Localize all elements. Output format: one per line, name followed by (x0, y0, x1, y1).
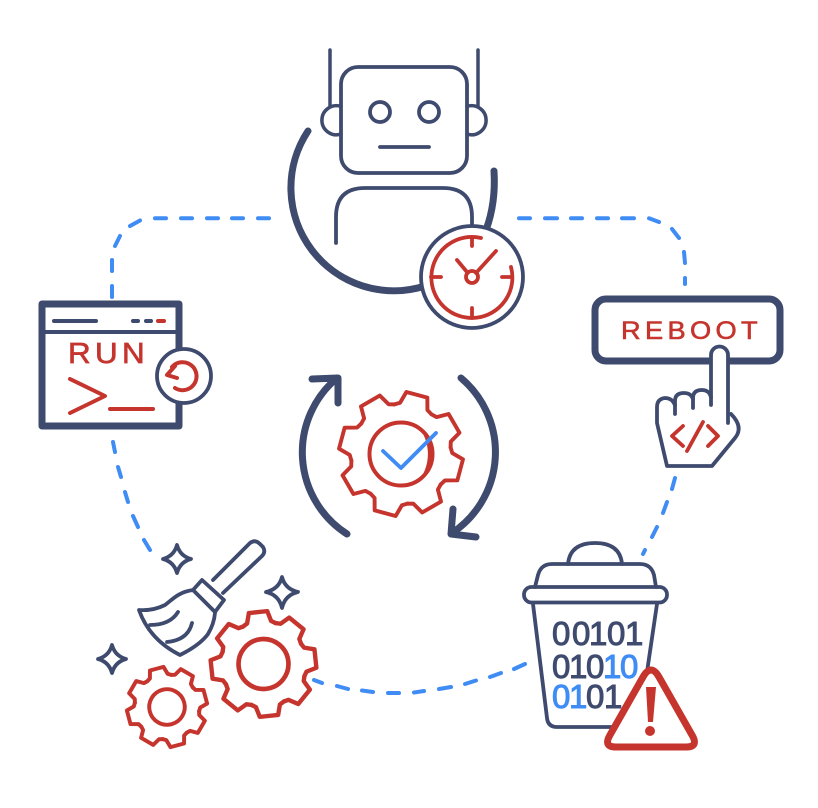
robot antennas and ears (322, 50, 486, 135)
large gear (206, 607, 321, 721)
prompt symbol (70, 379, 153, 413)
robot head (341, 67, 467, 173)
sparkles (98, 545, 298, 673)
icon: trash can with binary data (524, 543, 694, 747)
small gear (118, 658, 216, 756)
binary digits: 00101 (552, 615, 643, 652)
binary digits: 01 (552, 678, 587, 715)
reboot button (595, 299, 780, 361)
broom (139, 541, 264, 655)
terminal frame (42, 304, 179, 426)
icon: central gear with arrows (302, 378, 495, 537)
binary digits: 01 (586, 678, 622, 715)
trash body (533, 604, 657, 727)
pointing hand (657, 346, 739, 466)
icon: reboot button with hand (595, 299, 780, 466)
trash lid (524, 543, 667, 602)
robot eyes and mouth (370, 102, 439, 147)
REBOOT label: REBOOT (621, 317, 762, 345)
icon: broom with gears (98, 541, 321, 756)
central gear (326, 379, 476, 529)
clock face (421, 226, 523, 328)
robot body (336, 188, 472, 243)
binary digits: 10 (603, 648, 638, 685)
binary digits: 010 (552, 648, 604, 685)
circular arrow right (451, 378, 495, 537)
warning triangle (608, 670, 694, 747)
binary digits (552, 615, 643, 715)
code symbol (672, 422, 718, 451)
terminal header (42, 321, 179, 332)
clock dial and hands (431, 237, 512, 318)
circular arrow left (302, 378, 347, 534)
RUN label: RUN (68, 338, 149, 370)
restart badge (157, 349, 211, 403)
icon: terminal window with RUN (42, 304, 211, 426)
gear ring (370, 422, 434, 486)
check mark (383, 433, 436, 468)
dashed cycle connectors (112, 218, 685, 693)
robot circular arc (291, 131, 494, 291)
icon: robot with clock (291, 50, 523, 328)
